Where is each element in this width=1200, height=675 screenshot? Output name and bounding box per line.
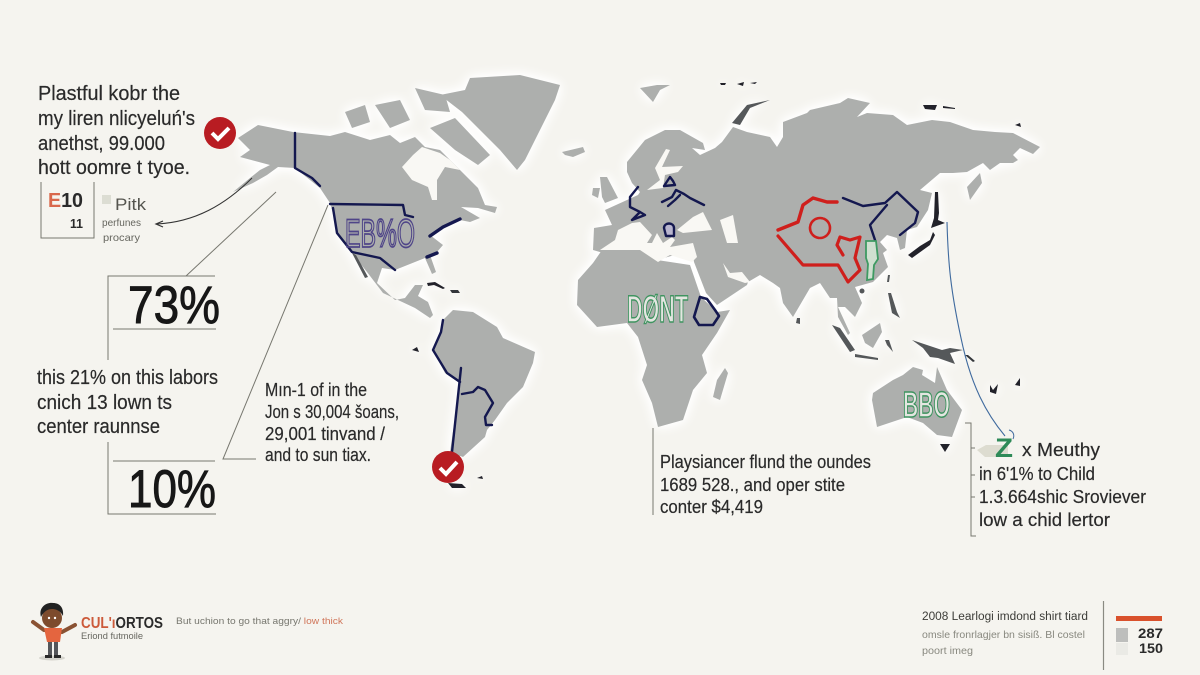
landmass: Greenland [440, 75, 560, 170]
footer note: poort imeg [922, 645, 973, 657]
landmass: Australia [872, 367, 962, 437]
leader line: 73% [186, 192, 276, 276]
text block: left middle: cnich 13 lown ts [37, 392, 172, 414]
text block: centre left callout: Mın-1 of in the [265, 379, 367, 400]
leader line: callout to North America [223, 205, 328, 459]
arrow: Japan to right callout [947, 222, 1005, 436]
landmass: Africa [577, 245, 730, 427]
stat: 10%: 10% [128, 460, 216, 519]
text block: left middle: center raunnse [37, 416, 160, 438]
text block: below Africa callout: Playsiancer flund the oundes [660, 451, 871, 472]
islands [345, 82, 1021, 488]
divider: footer [1102, 601, 1104, 670]
icon: top red check badge [204, 117, 236, 149]
region outlines: Europe and Africa [630, 177, 719, 325]
text block: top left intro: hott oomre t tyoe. [38, 157, 190, 179]
icon: green marker [977, 430, 1014, 463]
footer brand [81, 615, 163, 642]
footer note: omsle fronrlagjer bn sisiß. Bl costel [922, 629, 1085, 641]
stat: 73%: 73% [128, 276, 220, 335]
text block: centre left callout [265, 379, 399, 465]
legend: Pitk [102, 195, 147, 244]
text block: left middle [37, 367, 218, 438]
callout: right text with marker: x Meuthy [1022, 439, 1101, 460]
region outlines: East Asia [778, 192, 918, 282]
seas cut from the landmasses [402, 147, 750, 283]
footer brand: CUL'ıORTOS [81, 615, 163, 632]
landmass: South America [433, 310, 535, 457]
stat: 73% [108, 276, 220, 360]
text block: below Africa callout [653, 428, 871, 517]
legend: Pitk: Pitk [115, 195, 147, 214]
text block: centre left callout: and to sun tiax. [265, 444, 371, 465]
text block: top left intro: anethst, 99.000 [38, 133, 165, 155]
map landmasses [233, 75, 1040, 488]
text block: top left intro: my liren nlicyeluń's [38, 108, 195, 130]
footer note [922, 611, 1088, 657]
region outlines: Americas [295, 133, 493, 452]
footer note: 2008 Learlogi imdond shirt tiard [922, 611, 1088, 623]
stat box: E10 [41, 182, 94, 238]
callout: right text with marker [965, 423, 1146, 536]
text block: centre left callout: 29,001 tinvand / [265, 423, 386, 444]
footer mini legend [1116, 616, 1163, 656]
text block: below Africa callout: conter $4,419 [660, 496, 763, 517]
text block: left middle: this 21% on this labors [37, 367, 218, 389]
icon: child mascot [33, 603, 75, 660]
landmass: North America [233, 125, 497, 318]
footer mini legend: 287 [1138, 625, 1163, 641]
legend: Pitk: procary [103, 232, 141, 244]
stat box: E10: E10 [48, 190, 83, 212]
stat: 10% [108, 442, 216, 519]
text block: below Africa callout: 1689 528., and oper stite [660, 474, 845, 495]
icon: bottom red check badge [432, 451, 464, 483]
text block: top left intro: Plastful kobr the [38, 83, 180, 105]
map lettering: Australia: BBO [903, 384, 950, 425]
footer brand: Eriond futmoile [81, 631, 143, 642]
map lettering: United States: EB%O [345, 212, 415, 256]
callout: right text with marker: 1.3.664shic Sroviever [979, 486, 1146, 507]
footer mini legend: 150 [1139, 640, 1163, 656]
legend: Pitk: perfunes [102, 217, 141, 229]
callout: right text with marker: in 6'1% to Child [979, 463, 1095, 484]
arrow: Alaska to legend [156, 178, 252, 227]
callout: right text with marker: low a chid lertor [979, 509, 1110, 530]
landmass: Eurasia [593, 98, 1040, 335]
footer tagline: But uchion to go that aggry/ low thick [176, 616, 343, 627]
stat box: E10: 11 [70, 216, 83, 231]
map lettering: Africa: DØNT [627, 289, 688, 331]
world map [233, 75, 1040, 488]
text block: centre left callout: Jon s 30,004 šoans, [265, 401, 399, 422]
icon: green marker: Z [995, 433, 1013, 463]
text block: top left intro [38, 83, 195, 179]
